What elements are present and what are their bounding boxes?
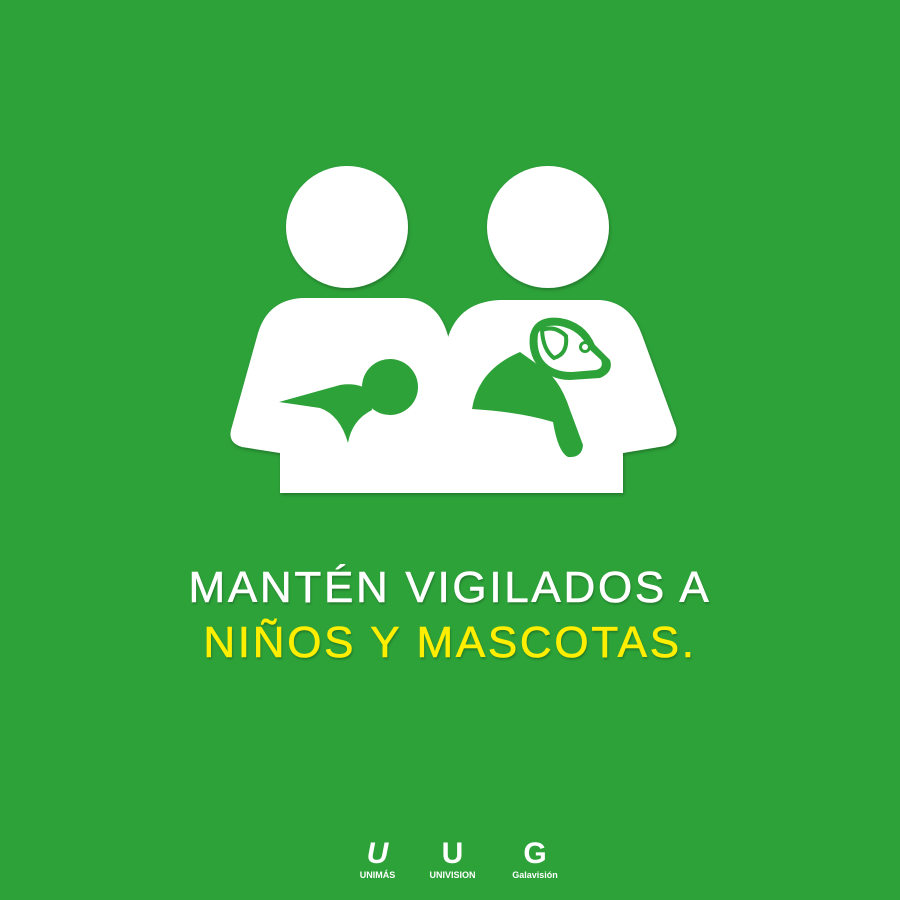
icon: right body [446,300,677,493]
logo: univision [429,837,476,880]
logo: galavision: Galavisión [512,870,558,880]
icon: left head [286,166,408,288]
logo: unimas: U [367,837,388,870]
icon: baby [279,359,418,443]
icon: dog [472,318,611,457]
icon: left body [230,298,449,493]
title line 2 (yellow): NIÑOS Y MASCOTAS. [203,618,697,667]
logos row [360,837,558,880]
title line 1: MANTÉN VIGILADOS A [189,563,711,612]
logo: galavision [512,837,558,880]
icon: right head [487,166,609,288]
logo: univision: UNIVISION [429,870,476,880]
logo: galavision: G [523,837,547,870]
logo: univision: U [442,837,463,870]
logo: unimas: UNIMÁS [360,870,395,880]
logo: unimas [360,837,395,880]
